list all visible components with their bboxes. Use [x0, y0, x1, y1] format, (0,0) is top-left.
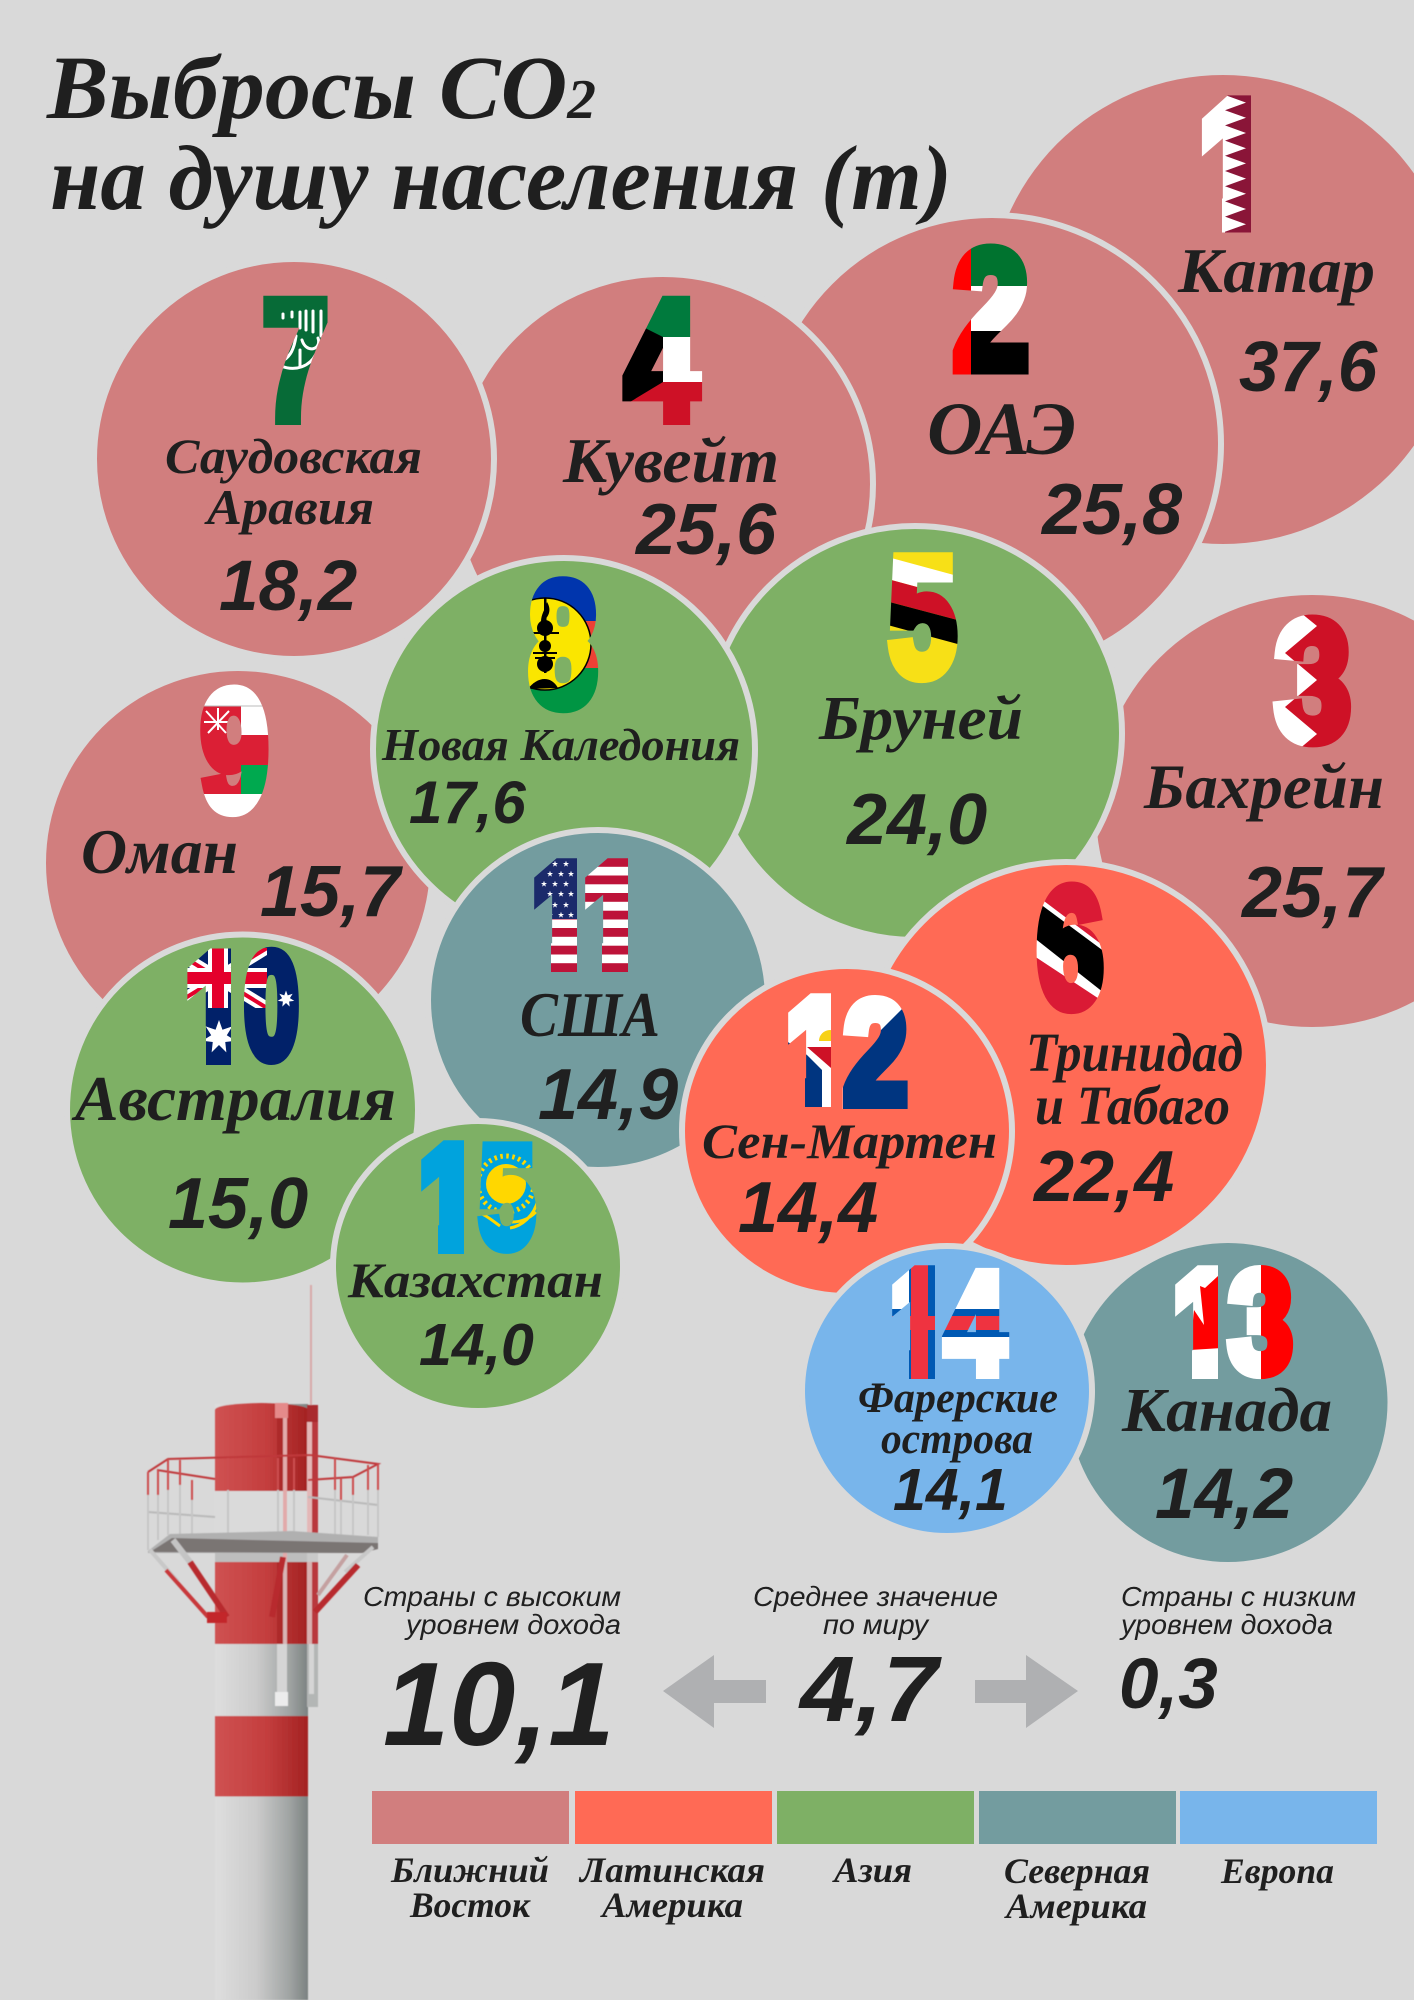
panel: Faroe Islands — [802, 1246, 1092, 1536]
flag number 9 — [200, 684, 268, 818]
country name: Канада — [1121, 1377, 1332, 1445]
panel: Kazakhstan — [333, 1121, 623, 1411]
country name: Тринидад — [1026, 1022, 1243, 1083]
value: low income: 0,3 — [1119, 1645, 1218, 1724]
label: low income: Страны с низким — [1121, 1581, 1356, 1612]
label: world average: Среднее значение — [753, 1581, 998, 1612]
label: world average — [753, 1581, 998, 1640]
arrow right — [975, 1655, 1078, 1728]
flag number 8 — [528, 576, 598, 714]
legend: Latin America — [575, 1791, 772, 1925]
value: 15,0 — [168, 1164, 308, 1244]
value: 14,9 — [538, 1055, 678, 1135]
panel: Saudi Arabia — [94, 259, 494, 659]
flag number 15 — [421, 1140, 536, 1254]
panel: Trinidad and Tobago — [863, 862, 1269, 1268]
legend: Europe — [1180, 1791, 1377, 1891]
legend: Asia — [777, 1791, 974, 1890]
country name: США — [520, 979, 660, 1050]
arrow left — [663, 1655, 766, 1728]
legend: Middle East — [372, 1791, 569, 1925]
flag number 13 — [1175, 1265, 1294, 1380]
value: 37,6 — [1239, 328, 1378, 407]
country name: Саудовская — [165, 428, 422, 484]
country name: Сен-Мартен — [702, 1113, 997, 1169]
country name: ОАЭ — [927, 388, 1076, 471]
flag number 12 — [788, 993, 908, 1109]
legend: Asia: Азия — [832, 1850, 912, 1890]
country name: Оман — [81, 816, 238, 887]
country name: Фарерские — [858, 1375, 1058, 1422]
value: high income: 10,1 — [383, 1638, 615, 1771]
value: 18,2 — [219, 547, 357, 626]
value: 14,4 — [738, 1168, 878, 1248]
value: 14,2 — [1155, 1455, 1293, 1534]
panel: Oman — [46, 671, 428, 999]
legend: Middle East: Ближний — [390, 1850, 549, 1890]
country name line 2: и Табаго — [1035, 1075, 1230, 1136]
country name: Новая Каледония — [381, 719, 740, 770]
legend: Middle East: Восток — [409, 1885, 531, 1925]
country name line 2: острова — [881, 1416, 1033, 1463]
flag number 2 — [952, 244, 1029, 374]
legend: North America: Северная — [1004, 1851, 1150, 1891]
value: 25,6 — [634, 490, 777, 570]
legend — [372, 1791, 1377, 1926]
chimney tower — [148, 1285, 378, 2000]
flag number 4 — [622, 296, 702, 425]
flag number 3 — [1272, 614, 1352, 748]
panel: Sint Maarten — [682, 966, 1012, 1296]
label: world average: по миру — [823, 1609, 930, 1640]
country name: Бруней — [818, 685, 1023, 753]
value: 24,0 — [845, 780, 987, 860]
label: low income: уровнем дохода — [1119, 1609, 1333, 1640]
panel: Kuwait — [470, 277, 876, 642]
title: на душу населения (т) — [50, 127, 952, 229]
flag number 7 — [263, 296, 328, 425]
country name: Кувейт — [562, 425, 779, 496]
country name line 2: Аравия — [204, 479, 374, 535]
panel: Brunei — [708, 526, 1122, 940]
country name: Австралия — [71, 1063, 396, 1134]
flag number 14 — [890, 1258, 1015, 1388]
value: 14,1 — [893, 1457, 1008, 1523]
panel: Canada — [1068, 1243, 1388, 1562]
panel: Australia — [67, 934, 418, 1286]
label: high income: уровнем дохода — [404, 1609, 621, 1640]
value: 14,0 — [419, 1312, 534, 1378]
value: 15,7 — [260, 852, 403, 932]
legend: Latin America: Америка — [600, 1885, 743, 1925]
legend: Latin America: Латинская — [578, 1850, 765, 1890]
panel: Qatar — [988, 75, 1414, 544]
flag number 6 — [1036, 882, 1104, 1014]
legend: Europe: Европа — [1220, 1851, 1334, 1891]
label: low income — [1119, 1581, 1356, 1640]
flag number 10 — [187, 946, 299, 1065]
flag number 11 — [534, 858, 628, 972]
title — [46, 39, 952, 229]
legend: North America: Америка — [1004, 1886, 1147, 1926]
value: world average: 4,7 — [798, 1637, 943, 1741]
legend: North America — [979, 1791, 1176, 1926]
value: 17,6 — [409, 769, 526, 836]
flag number 5 — [887, 552, 958, 684]
label: high income: Страны с высоким — [363, 1581, 621, 1612]
value: 25,7 — [1240, 853, 1385, 933]
value: 22,4 — [1032, 1137, 1174, 1217]
value: 25,8 — [1040, 470, 1182, 550]
label: high income — [363, 1581, 621, 1640]
panel: UAE — [802, 212, 1224, 640]
panel: Bahrain — [1096, 595, 1414, 1027]
country name: Казахстан — [347, 1252, 603, 1308]
country name: Катар — [1177, 235, 1375, 306]
country name: Бахрейн — [1143, 751, 1384, 822]
title: Выбросы CO2 — [46, 39, 596, 138]
flag number 1 — [1202, 95, 1251, 232]
panel: New Caledonia — [373, 558, 755, 940]
panel: USA — [428, 830, 768, 1170]
